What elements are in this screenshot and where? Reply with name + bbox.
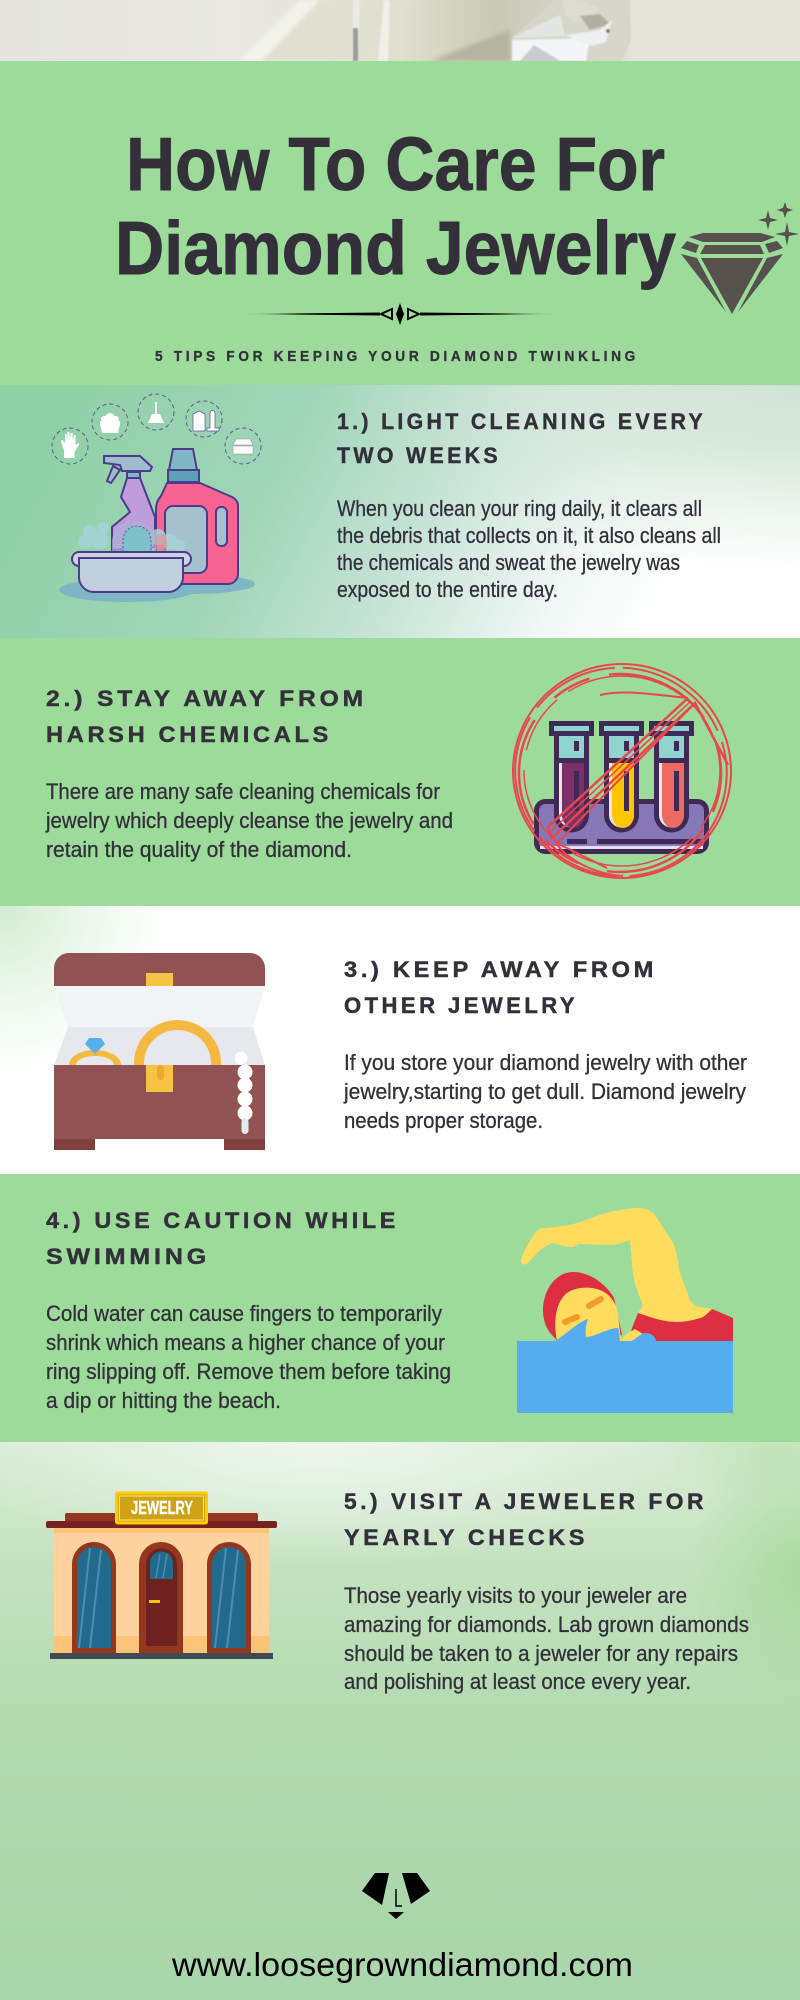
header photo: diamond on fabric bbox=[0, 0, 800, 61]
title: How To Care For bbox=[126, 122, 665, 206]
heading: YEARLY CHECKS bbox=[344, 1525, 588, 1550]
icon: dashed tool circles bbox=[52, 394, 261, 464]
body text bbox=[343, 1050, 747, 1133]
heading: 5.) VISIT A JEWELER FOR bbox=[344, 1489, 707, 1514]
body text: needs proper storage. bbox=[344, 1108, 543, 1133]
icon: jewelry store bbox=[46, 1493, 277, 1659]
body text: If you store your diamond jewelry with other bbox=[344, 1050, 747, 1075]
right window bbox=[207, 1542, 251, 1653]
heading: 1.) LIGHT CLEANING EVERY bbox=[337, 409, 706, 434]
body text: the chemicals and sweat the jewelry was bbox=[337, 550, 680, 575]
left window bbox=[72, 1542, 116, 1653]
body text: Cold water can cause fingers to temporarily bbox=[46, 1301, 442, 1326]
body text: Those yearly visits to your jeweler are bbox=[344, 1583, 687, 1608]
store sign: JEWELRY bbox=[131, 1498, 193, 1518]
body text: exposed to the entire day. bbox=[337, 577, 558, 602]
decorative divider bbox=[244, 303, 557, 325]
logo bbox=[362, 1873, 430, 1919]
body text: should be taken to a jeweler for any repairs bbox=[344, 1641, 738, 1666]
heading bbox=[46, 1208, 399, 1269]
icon: cleaning supplies bbox=[52, 394, 261, 602]
icon: diamond with sparkles bbox=[681, 202, 799, 314]
body text bbox=[46, 1301, 451, 1413]
body text: jewelry,starting to get dull. Diamond jewelry bbox=[343, 1079, 746, 1104]
icon: swimmer bbox=[517, 1208, 733, 1413]
body text: the debris that collects on it, it also cleans all bbox=[337, 523, 721, 548]
soap bubbles bbox=[78, 522, 186, 552]
panel: title header bbox=[0, 61, 800, 386]
heading bbox=[337, 409, 706, 468]
heading: SWIMMING bbox=[46, 1244, 210, 1269]
door bbox=[139, 1542, 183, 1653]
body text: retain the quality of the diamond. bbox=[46, 837, 352, 862]
test tube purple bbox=[552, 724, 592, 830]
panel: tip 1 light cleaning bbox=[0, 385, 800, 638]
heading bbox=[344, 1489, 707, 1550]
panel: tip 2 harsh chemicals bbox=[0, 638, 800, 906]
floor shadow bbox=[125, 574, 255, 594]
test tube red bbox=[652, 724, 692, 830]
body text: a dip or hitting the beach. bbox=[46, 1388, 281, 1413]
body text: When you clean your ring daily, it clears all bbox=[337, 496, 702, 521]
test tube yellow bbox=[602, 724, 642, 830]
spray bottle bbox=[104, 456, 155, 550]
subtitle: 5 TIPS FOR KEEPING YOUR DIAMOND TWINKLING bbox=[155, 348, 639, 365]
heading: TWO WEEKS bbox=[337, 443, 501, 468]
body text: There are many safe cleaning chemicals for bbox=[46, 779, 440, 804]
heading: 4.) USE CAUTION WHILE bbox=[46, 1208, 399, 1233]
body text: ring slipping off. Remove them before taking bbox=[46, 1359, 451, 1384]
body text: and polishing at least once every year. bbox=[344, 1669, 691, 1694]
heading: 3.) KEEP AWAY FROM bbox=[344, 957, 657, 982]
pink detergent bottle bbox=[156, 449, 238, 584]
body text: jewelry which deeply cleanse the jewelry and bbox=[45, 808, 453, 833]
panel: tip 4 swimming bbox=[0, 1174, 800, 1442]
website url: www.loosegrowndiamond.com bbox=[171, 1946, 633, 1983]
heading: HARSH CHEMICALS bbox=[46, 722, 332, 747]
body text: amazing for diamonds. Lab grown diamonds bbox=[344, 1612, 749, 1637]
red prohibition mark bbox=[486, 638, 756, 906]
panel: tip 3 storage bbox=[0, 906, 800, 1174]
title bbox=[115, 122, 676, 290]
heading bbox=[344, 957, 657, 1018]
body text bbox=[344, 1583, 749, 1694]
wash basin bbox=[72, 552, 191, 592]
icon: crossed-out test tubes bbox=[486, 638, 756, 906]
heading: OTHER JEWELRY bbox=[344, 993, 578, 1018]
panel: tip 5 yearly checks bbox=[0, 1442, 800, 2000]
tube rack bbox=[536, 802, 706, 852]
heading: 2.) STAY AWAY FROM bbox=[46, 686, 367, 711]
heading bbox=[46, 686, 367, 747]
body text bbox=[45, 779, 453, 862]
body text: shrink which means a higher chance of your bbox=[46, 1330, 445, 1355]
title: Diamond Jewelry bbox=[115, 206, 676, 290]
icon: open jewelry box bbox=[54, 953, 265, 1150]
body text bbox=[337, 496, 721, 602]
store sign bbox=[116, 1493, 206, 1523]
